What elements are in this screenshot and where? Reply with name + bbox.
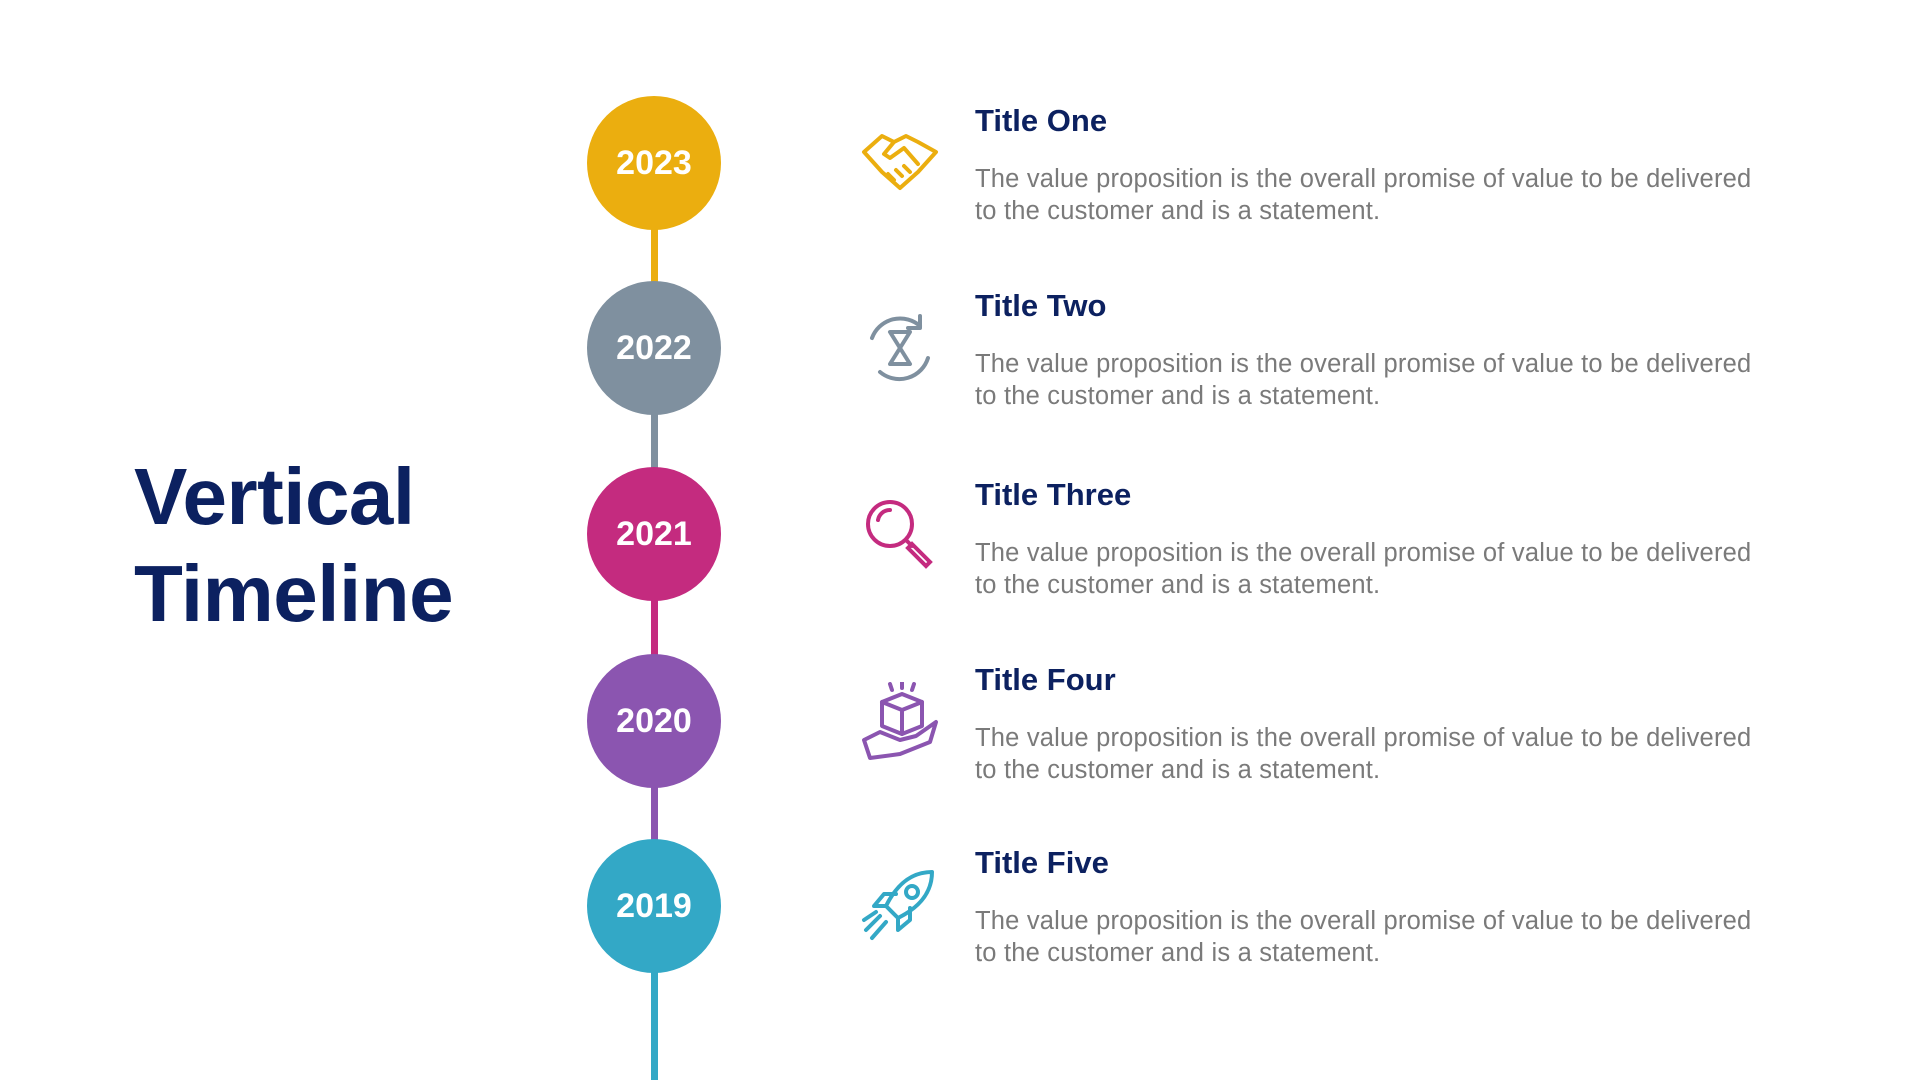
timeline line segments: [587, 97, 721, 1080]
item 1: [975, 103, 1751, 225]
circle 2023: 2023: [616, 144, 692, 182]
circle 2019: 2019: [616, 886, 692, 924]
item 1: Title One: [975, 103, 1107, 138]
item 2: to the customer and is a statement.: [975, 382, 1380, 410]
item 3: The value proposition is the overall promise of value to be delivered: [975, 539, 1751, 567]
item 1: The value proposition is the overall promise of value to be delivered: [975, 165, 1751, 193]
item 4: to the customer and is a statement.: [975, 756, 1380, 784]
item 4: The value proposition is the overall promise of value to be delivered: [975, 724, 1751, 752]
circle 2020: [587, 654, 721, 788]
circle 2022: 2022: [616, 328, 692, 366]
item 3: to the customer and is a statement.: [975, 571, 1380, 599]
icon: rocket: [862, 870, 934, 940]
item 5: Title Five: [975, 845, 1109, 880]
item 2: The value proposition is the overall promise of value to be delivered: [975, 350, 1751, 378]
item 4: Title Four: [975, 662, 1116, 697]
circle 2021: [587, 467, 721, 601]
title: Timeline: [134, 549, 453, 638]
item 3: Title Three: [975, 477, 1131, 512]
title: [134, 452, 453, 638]
item 2: Title Two: [975, 288, 1106, 323]
circle 2022: [587, 281, 721, 415]
icon: handshake: [862, 134, 938, 190]
icon: hourglass cycle: [870, 314, 930, 382]
icon: magnifier: [866, 500, 933, 569]
circle 2019: [587, 839, 721, 973]
circle 2023: [587, 96, 721, 230]
item 1: to the customer and is a statement.: [975, 197, 1380, 225]
circle 2021: 2021: [616, 514, 692, 552]
item 3: [975, 477, 1751, 599]
item 5: to the customer and is a statement.: [975, 939, 1380, 967]
item 5: [975, 845, 1751, 967]
icon: box in hand: [862, 682, 938, 760]
circle 2020: 2020: [616, 702, 692, 740]
title: Vertical: [134, 452, 415, 541]
item 2: [975, 288, 1751, 410]
item 5: The value proposition is the overall promise of value to be delivered: [975, 907, 1751, 935]
item 4: [975, 662, 1751, 784]
